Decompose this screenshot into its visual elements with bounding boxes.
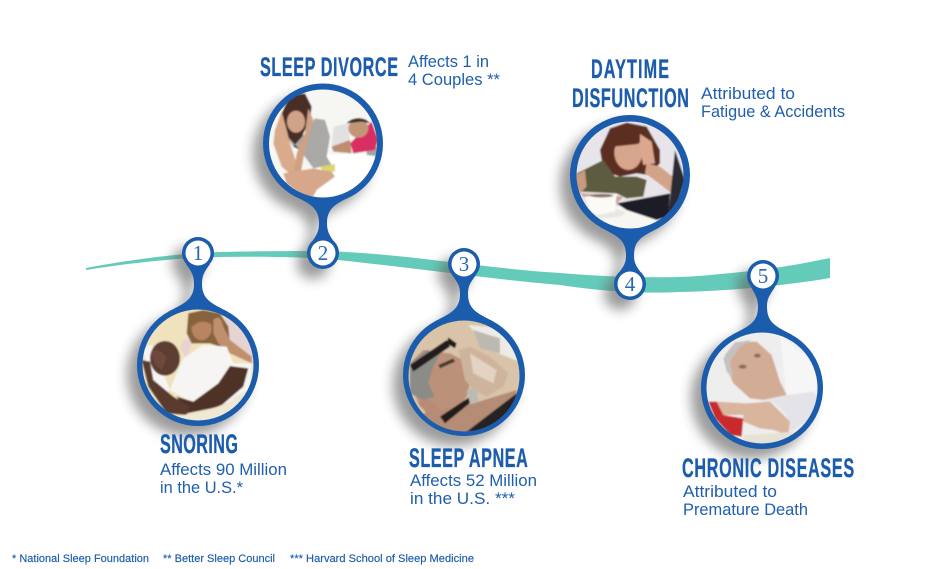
text: snoring statistic: Affects 90 Million: [160, 461, 287, 479]
heading: snoring: SNORING: [160, 429, 238, 459]
text: chronic diseases statistic: Premature Death: [683, 501, 808, 519]
heading: daytime disfunction: DAYTIME: [591, 54, 669, 84]
text: sleep divorce statistic: Affects 1 in: [408, 53, 489, 71]
heading: chronic diseases: CHRONIC DISEASES: [682, 453, 854, 483]
text: sleep divorce statistic: 4 Couples **: [408, 71, 501, 89]
heading: sleep divorce: SLEEP DIVORCE: [260, 52, 398, 82]
pin 5: chronic diseases: [701, 260, 823, 449]
text: daytime disfunction statistic: Attributed to: [701, 85, 795, 103]
text: snoring statistic: [160, 461, 287, 497]
text: sleep apnea statistic: [410, 472, 537, 508]
pin shadows: [127, 94, 813, 459]
number 2: 2: [318, 241, 328, 265]
heading: daytime disfunction: [572, 54, 689, 113]
text: sleep apnea statistic: in the U.S. ***: [410, 490, 516, 508]
heading: sleep apnea: SLEEP APNEA: [409, 443, 528, 473]
pin 1: snoring: [137, 237, 260, 427]
photo: tired woman at laptop: [576, 122, 684, 228]
pin 2: sleep divorce: [263, 84, 383, 269]
pin 4: daytime disfunction: [570, 115, 690, 300]
number 4: 4: [625, 272, 636, 296]
text: sleep divorce statistic: [408, 53, 501, 89]
number 1: 1: [193, 241, 203, 265]
timeline ribbon: [86, 251, 830, 293]
footnotes: [12, 553, 474, 565]
text: daytime disfunction statistic: Fatigue & Accidents: [701, 103, 845, 121]
footnotes: ** Better Sleep Council: [163, 553, 275, 565]
photo: elderly patient in hospital bed: [703, 332, 822, 445]
heading: daytime disfunction: DISFUNCTION: [572, 83, 689, 113]
pin 3: sleep apnea: [403, 248, 525, 437]
text: sleep apnea statistic: Affects 52 Million: [410, 472, 537, 490]
footnotes: *** Harvard School of Sleep Medicine: [290, 553, 474, 565]
number 5: 5: [758, 264, 768, 288]
photo: man with CPAP mask: [408, 320, 520, 432]
number 3: 3: [459, 252, 469, 276]
footnotes: * National Sleep Foundation: [12, 553, 149, 565]
text: daytime disfunction statistic: [701, 85, 845, 121]
text: chronic diseases statistic: [683, 483, 808, 519]
text: chronic diseases statistic: Attributed to: [683, 483, 777, 501]
text: snoring statistic: in the U.S.*: [160, 479, 244, 497]
photo: man snoring beside woman: [142, 310, 254, 420]
photo: woman covering ears, man sleeping: [267, 87, 380, 200]
